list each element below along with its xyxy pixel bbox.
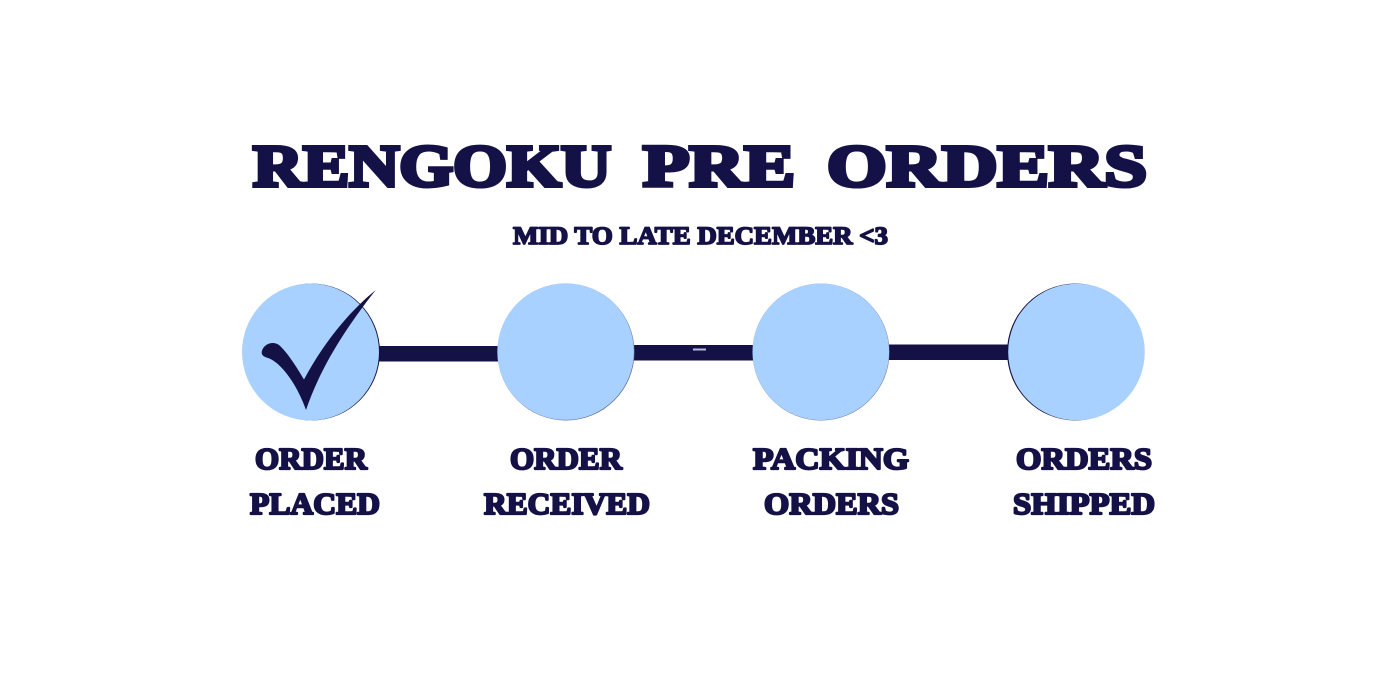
connector: order placed to order received [375, 346, 503, 362]
title [253, 133, 1147, 199]
title: PRE [643, 133, 795, 199]
label: packing orders: ORDERS [764, 486, 899, 521]
step 2: order received circle [497, 283, 634, 420]
label: packing orders: PACKING [753, 441, 909, 476]
label: order placed [250, 441, 380, 521]
step 3: packing orders circle [752, 284, 890, 420]
label: order received [484, 441, 650, 521]
label: order placed: PLACED [250, 486, 380, 521]
label: orders shipped [1013, 441, 1155, 521]
title: ORDERS [827, 133, 1147, 199]
label: orders shipped: SHIPPED [1013, 486, 1155, 521]
label: order received: ORDER [510, 441, 623, 476]
step 4: orders shipped circle [1007, 284, 1145, 420]
step 1: order placed circle with check [242, 284, 380, 420]
icon: check mark [262, 290, 376, 410]
label: packing orders [753, 441, 909, 521]
connector: order received to packing orders [630, 345, 758, 360]
subtitle: MID TO LATE DECEMBER <3 [513, 223, 888, 250]
label: order received: RECEIVED [484, 486, 650, 521]
title: RENGOKU [253, 133, 611, 199]
label: orders shipped: ORDERS [1016, 441, 1152, 476]
progress tracker [242, 283, 1145, 420]
connector: packing orders to orders shipped [885, 344, 1013, 360]
label: order placed: ORDER [255, 441, 368, 476]
